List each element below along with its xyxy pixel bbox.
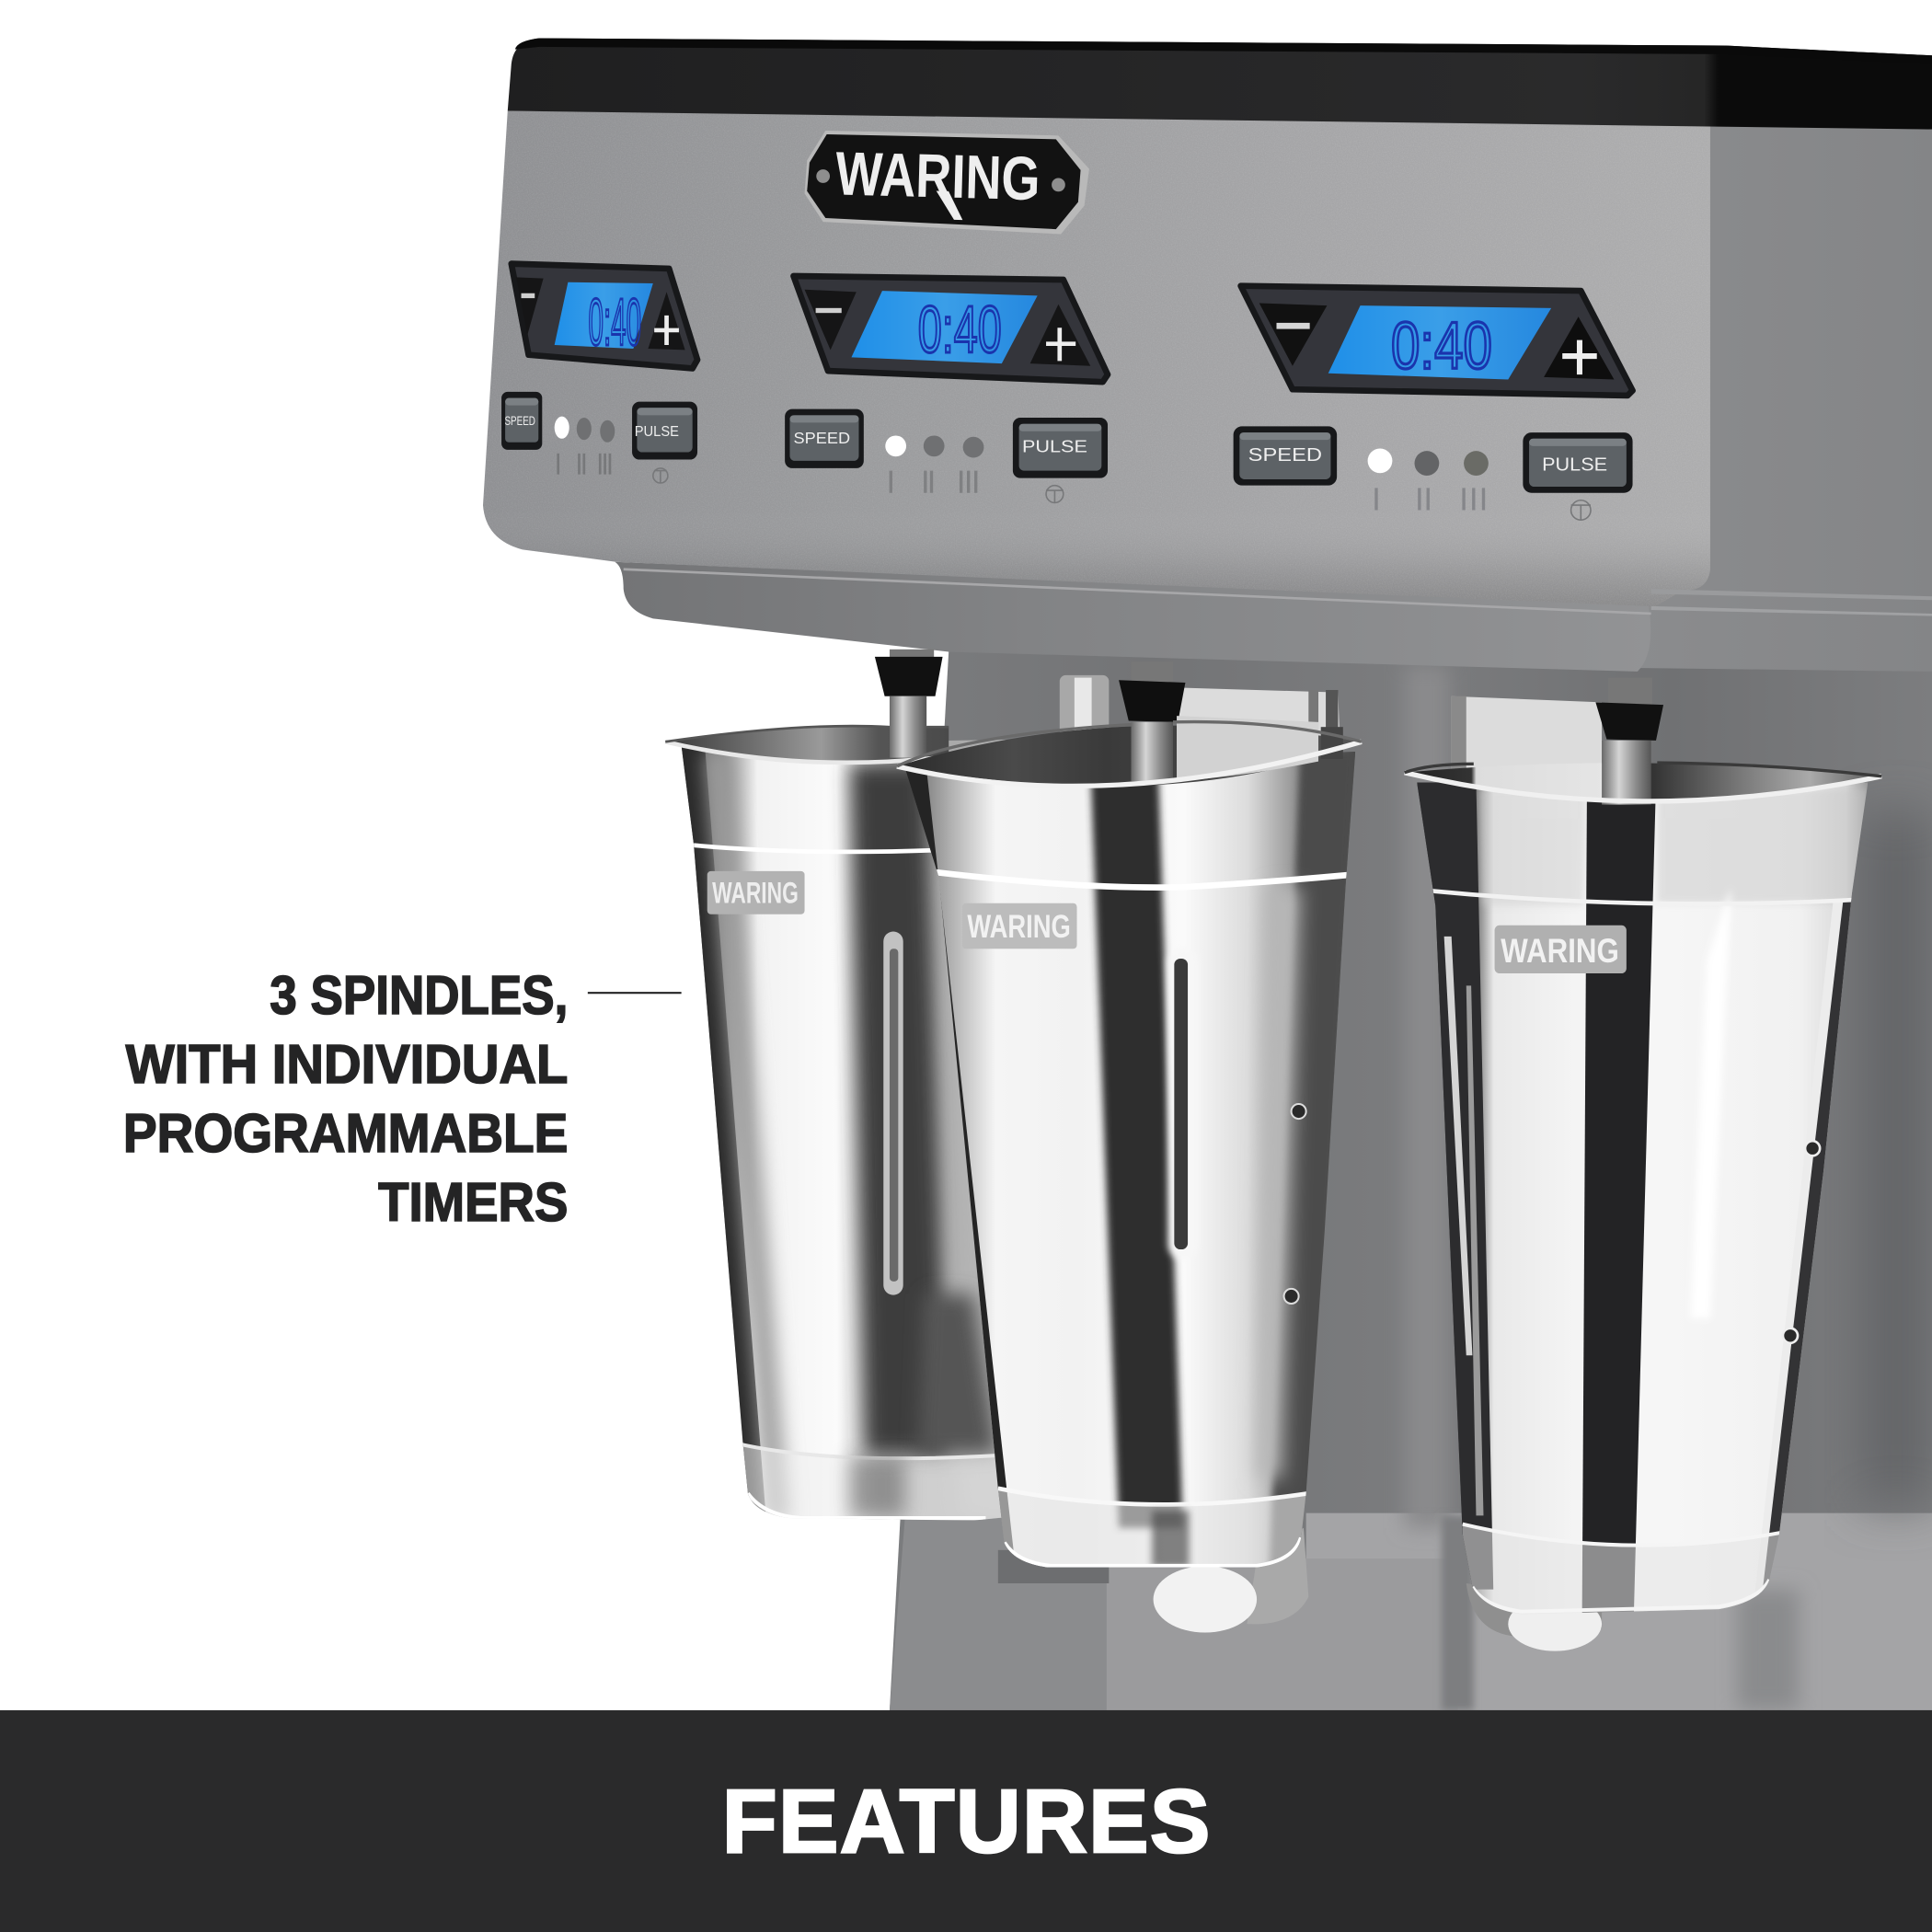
right pulse button <box>1523 432 1633 493</box>
centre speed lights <box>885 435 983 493</box>
black top band <box>508 39 1932 130</box>
left plus button <box>648 292 685 350</box>
centre cup body <box>905 740 1355 1577</box>
centre speed button <box>785 409 864 468</box>
agitator tips and cup guards <box>998 1528 1602 1651</box>
right side face <box>1627 122 1932 672</box>
centre cup dimples <box>1284 1104 1306 1304</box>
callout text: WITH INDIVIDUAL <box>126 1035 568 1095</box>
control panel: right <box>1234 286 1633 520</box>
right timer icon <box>1571 500 1591 520</box>
right speed lights <box>1368 449 1489 510</box>
centre minus button <box>805 290 857 350</box>
right plus button <box>1544 316 1614 379</box>
centre cup logo <box>962 903 1077 949</box>
callout text: 3 SPINDLES, <box>270 966 568 1026</box>
right display <box>1328 305 1551 379</box>
centre spindle <box>1119 661 1185 722</box>
centre pulse button: PULSE <box>1022 437 1087 456</box>
badge wordmark: WARING <box>834 139 1041 213</box>
right cup dimples <box>1783 1141 1820 1343</box>
left timer icon <box>653 468 668 483</box>
left cup rim <box>665 742 949 763</box>
left cup body <box>682 740 1027 1528</box>
right speed button: SPEED <box>1248 445 1322 466</box>
banner heading: FEATURES <box>722 1771 1210 1871</box>
badge screws <box>816 169 1065 191</box>
left pulse button: PULSE <box>635 423 679 440</box>
lower lip <box>615 562 1650 672</box>
right cup rim <box>1405 773 1881 801</box>
right cup body <box>1417 776 1868 1627</box>
centre cup interior <box>897 726 1362 786</box>
callout leader line <box>588 992 682 994</box>
centre speed button: SPEED <box>793 429 850 447</box>
left pulse button <box>632 402 697 460</box>
left display <box>555 282 653 349</box>
centre pulse button <box>1013 418 1108 478</box>
centre display <box>851 291 1038 363</box>
centre timer icon <box>1046 486 1064 502</box>
footer banner <box>0 1710 1932 1932</box>
callout: spindles <box>123 966 682 1233</box>
spindle guard behind right cup <box>1452 696 1602 776</box>
left spindle <box>875 650 943 696</box>
left cup interior <box>665 726 949 763</box>
left speed button: SPEED <box>504 414 535 428</box>
callout text: PROGRAMMABLE <box>123 1104 568 1164</box>
callout text: TIMERS <box>378 1173 568 1233</box>
left cup <box>665 696 1027 1528</box>
machine head <box>483 39 1932 672</box>
right timer readout: 0:40 <box>1391 309 1492 383</box>
brand badge <box>805 131 1089 234</box>
right spindle <box>1595 678 1663 741</box>
centre cup logo: WARING <box>967 909 1071 945</box>
centre cup rim <box>897 742 1362 786</box>
right cup logo <box>1495 926 1627 973</box>
right minus button <box>1259 303 1327 366</box>
right cup logo: WARING <box>1501 931 1619 970</box>
left minus button <box>516 277 544 335</box>
front face <box>483 111 1710 609</box>
left speed lights <box>555 417 615 475</box>
left speed button <box>501 392 542 450</box>
callout text <box>123 966 568 1233</box>
right pulse button: PULSE <box>1542 455 1607 476</box>
left cup logo <box>707 871 805 914</box>
right cup <box>1405 741 1881 1627</box>
control panel: centre <box>785 276 1108 502</box>
control panel: left: 0:40 <box>589 286 641 360</box>
right cup interior <box>1405 763 1881 801</box>
centre plus button <box>1030 305 1090 366</box>
left cup logo: WARING <box>712 877 799 910</box>
centre cup <box>897 716 1362 1577</box>
control panel: left <box>501 264 697 483</box>
centre timer readout: 0:40 <box>918 293 1002 367</box>
mixer column <box>890 650 1932 1710</box>
spindle guard behind centre cup <box>1060 675 1340 766</box>
right speed button <box>1234 426 1337 486</box>
